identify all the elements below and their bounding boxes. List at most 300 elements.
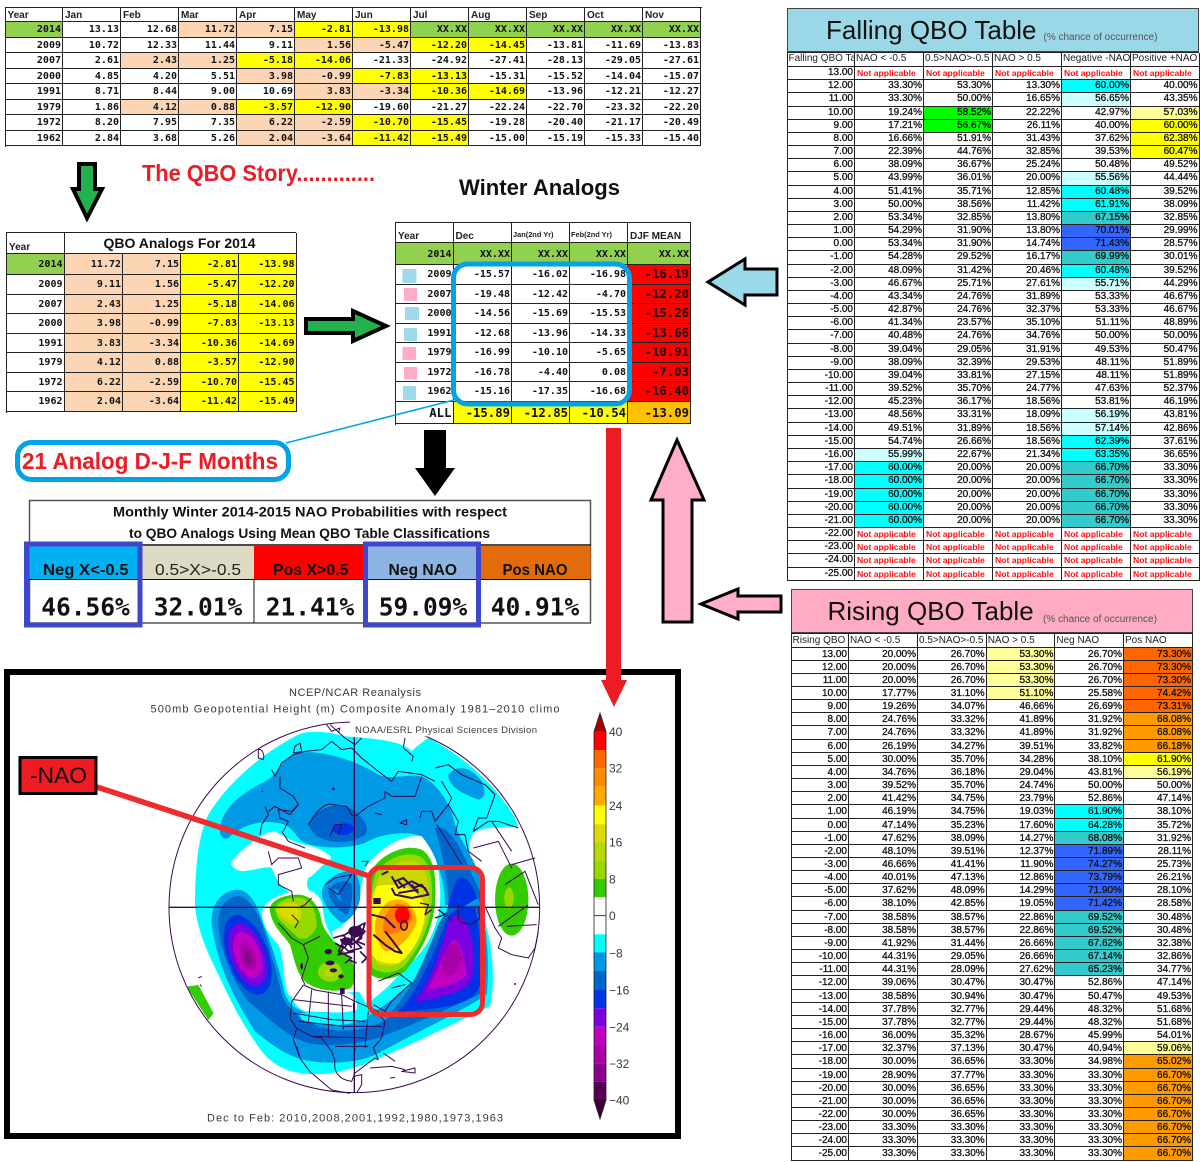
table: winter analogs: XX.XX <box>480 249 510 260</box>
falling table data grid: -8.00 <box>830 344 853 355</box>
falling table data grid: -5.00 <box>830 304 853 315</box>
falling table data grid: 22.67% <box>957 449 991 460</box>
falling table data grid: 54.74% <box>888 436 922 447</box>
rising table data grid: 52.86% <box>1088 793 1122 804</box>
falling table data grid: 50.00% <box>1095 330 1129 341</box>
large southern blue band <box>212 890 488 1063</box>
table: QBO analogs for 2014: -13.13 <box>258 318 294 329</box>
table: winter analogs: -5.65 <box>596 347 626 358</box>
rising table data grid: 30.00% <box>882 1056 916 1067</box>
rising table data grid: 38.57% <box>951 912 985 923</box>
probability values <box>41 592 579 622</box>
falling table data grid: 56.19% <box>1095 409 1129 420</box>
probability values: 40.91% <box>491 592 579 622</box>
table: winter analogs: XX.XX <box>538 249 568 260</box>
probabilities title <box>113 504 507 541</box>
rising table data grid: 33.32% <box>951 727 985 738</box>
falling table data grid: 32.85% <box>1164 212 1198 223</box>
table: monthly QBO values by year: 8.44 <box>153 86 177 97</box>
panel: winter NAO probabilities: Neg NAO <box>388 562 457 579</box>
table: monthly QBO values by year: 5.51 <box>211 70 235 82</box>
falling table data grid: 39.52% <box>1164 186 1198 197</box>
rising table data grid: -24.00 <box>819 1135 847 1146</box>
table: monthly QBO values by year: XX.XX <box>611 24 641 35</box>
rising table data grid: -18.00 <box>819 1056 847 1067</box>
table: QBO analogs for 2014: 1962 <box>38 396 62 407</box>
rising table data grid: 6.00 <box>828 741 847 752</box>
rising table title: (% chance of occurrence) <box>1043 614 1157 625</box>
falling table data grid: Not applicable <box>857 529 916 539</box>
table: winter analogs: -12.68 <box>474 328 510 339</box>
rising table data grid: 68.08% <box>1157 714 1191 725</box>
table: QBO analogs for 2014 <box>6 232 296 412</box>
table: monthly QBO values by year: -10.70 <box>373 117 409 128</box>
falling table data grid: Not applicable <box>1064 569 1123 579</box>
table: monthly QBO values by year: 3.98 <box>269 70 293 82</box>
falling table data grid: -10.00 <box>825 370 853 381</box>
falling table data grid: 48.09% <box>888 265 922 276</box>
table: monthly QBO values by year: 2000 <box>37 70 61 82</box>
rising table data grid: 66.70% <box>1157 1109 1191 1120</box>
falling table data grid: -14.00 <box>825 423 853 434</box>
rising table data grid: 48.10% <box>882 846 916 857</box>
table: QBO analogs for 2014: 1991 <box>38 338 62 348</box>
falling table data grid: -15.00 <box>825 436 853 447</box>
rising table data grid: 13.00 <box>822 648 847 660</box>
falling table data grid: 58.52% <box>957 107 991 118</box>
rising table data grid: -1.00 <box>824 833 847 844</box>
probabilities title: Monthly Winter 2014-2015 NAO Probabilities with respect <box>113 504 507 520</box>
table: monthly QBO values by year: 13.13 <box>89 24 119 35</box>
rising table data grid: 33.30% <box>1019 1135 1053 1146</box>
table: monthly QBO values by year: -22.20 <box>663 102 699 112</box>
falling table data grid: Not applicable <box>1133 529 1192 539</box>
table: monthly QBO values by year: 7.35 <box>211 117 235 128</box>
falling table data grid: -25.00 <box>825 568 853 579</box>
header: Neg X<-0.5 <box>30 546 142 580</box>
falling table data grid: 11.42% <box>1027 199 1060 210</box>
rising table data grid: 39.51% <box>951 846 985 857</box>
panel: winter NAO probabilities: 0.5>X>-0.5 <box>155 562 241 579</box>
table: monthly QBO values by year: -22.70 <box>547 102 583 112</box>
falling table data grid: 53.33% <box>1095 291 1129 302</box>
rising table data grid: 66.70% <box>1157 1148 1191 1159</box>
table: QBO analogs for 2014: -5.47 <box>207 279 237 290</box>
colour bar labels: −16 <box>609 984 630 998</box>
falling table data grid: 40.00% <box>1164 80 1198 91</box>
falling table data grid: 70.01% <box>1095 225 1129 236</box>
rising table data grid: -23.00 <box>819 1122 847 1133</box>
falling table data grid: 16.66% <box>888 133 922 144</box>
table: winter analogs: 1972 <box>427 367 452 378</box>
falling table data grid: 18.56% <box>1026 423 1060 434</box>
rising table data grid: 28.09% <box>951 964 985 975</box>
table: monthly QBO values by year: 8.71 <box>95 86 119 97</box>
table: winter analogs: Jan(2nd Yr) <box>513 230 554 238</box>
falling table data grid: 54.28% <box>888 251 922 262</box>
rising table data grid: 50.00% <box>1088 780 1122 791</box>
rising table data grid: 12.00 <box>822 662 847 673</box>
falling table data grid: 62.38% <box>1164 133 1198 144</box>
falling table data grid: 60.00% <box>1164 120 1198 131</box>
rising table data grid: 41.92% <box>882 938 916 949</box>
callout: 21 Analog D-J-F Months <box>18 442 288 480</box>
table: monthly QBO values by year: -5.18 <box>263 55 293 66</box>
falling table title <box>786 8 1198 52</box>
rising table data grid: 44.31% <box>882 964 916 975</box>
rising table data grid: 53.30% <box>1019 675 1053 686</box>
rising table data grid: 74.27% <box>1088 859 1122 870</box>
table: winter analogs: 0.08 <box>602 367 626 378</box>
colour bar <box>594 713 630 1119</box>
table: monthly QBO values by year: -13.83 <box>663 40 699 50</box>
panel: winter NAO probabilities: Neg X<-0.5 <box>43 562 129 579</box>
falling table data grid: 51.91% <box>957 133 991 144</box>
falling table data grid: 26.11% <box>1027 120 1060 131</box>
colour bar labels: 40 <box>609 725 623 739</box>
table: winter analogs: 2014 <box>427 249 452 260</box>
rising table data grid: NAO < -0.5 <box>850 635 900 646</box>
table: monthly QBO values by year: 2014 <box>37 24 61 35</box>
table: monthly QBO values by year: -15.31 <box>489 70 525 82</box>
rising table data grid: 46.19% <box>882 806 916 817</box>
table: monthly QBO values by year: 2009 <box>37 40 61 50</box>
rising table data grid: -8.00 <box>824 925 847 936</box>
table: QBO analogs for 2014: 6.22 <box>97 376 121 388</box>
rising table data grid: 47.13% <box>951 872 985 883</box>
probability values: 21.41% <box>266 592 354 622</box>
table: winter analogs: XX.XX <box>596 249 626 260</box>
table: winter analogs: -16.19 <box>645 267 689 281</box>
header: Neg NAO <box>366 546 479 580</box>
falling table data grid: 33.30% <box>888 80 922 91</box>
falling table data grid: 0.00 <box>834 238 853 249</box>
table: monthly QBO values by year: -2.59 <box>321 117 351 128</box>
falling table data grid: 71.43% <box>1095 238 1129 249</box>
colour bar labels <box>609 725 630 1108</box>
arrow: green right <box>306 311 386 341</box>
falling table data grid: 31.89% <box>957 423 991 434</box>
falling table data grid: 55.71% <box>1095 278 1129 289</box>
falling table data grid: -21.00 <box>825 515 853 526</box>
table: monthly QBO values by year: -0.99 <box>321 70 351 82</box>
falling table data grid: 56.65% <box>1095 93 1129 104</box>
falling table data grid: 66.70% <box>1095 462 1129 473</box>
table: winter analogs: -13.09 <box>645 406 689 420</box>
rising table data grid: 32.37% <box>882 1043 916 1054</box>
rising table data grid: 34.75% <box>951 806 985 817</box>
falling table data grid: 51.11% <box>1096 317 1129 328</box>
table: monthly QBO values by year: -19.28 <box>489 117 525 128</box>
table: monthly QBO values by year: 7.15 <box>269 24 293 35</box>
table: monthly QBO values by year: Jan <box>65 10 82 20</box>
rising table data grid: 38.58% <box>882 912 916 923</box>
falling table data grid: 41.34% <box>888 317 922 328</box>
falling table data grid: 29.99% <box>1164 225 1198 236</box>
falling table data grid: 33.30% <box>1164 475 1198 486</box>
table: winter analogs: 1979 <box>427 347 452 358</box>
falling table data grid: 24.76% <box>957 291 991 302</box>
falling table data grid: 66.70% <box>1095 488 1129 500</box>
falling table data grid: 50.47% <box>1164 344 1198 355</box>
falling table data grid: 43.34% <box>888 291 922 302</box>
rising table data grid: 24.74% <box>1019 780 1053 791</box>
rising table data grid: 67.14% <box>1088 951 1122 962</box>
table: monthly QBO values by year: -14.06 <box>315 55 351 66</box>
table: monthly QBO values by year: 5.26 <box>211 132 235 144</box>
table: monthly QBO values by year: Nov <box>645 10 664 20</box>
falling table data grid: 36.65% <box>1164 449 1198 460</box>
falling table data grid: 35.70% <box>957 383 991 394</box>
rising table data grid: 50.47% <box>1088 991 1122 1002</box>
falling table data grid: 46.67% <box>1164 304 1198 315</box>
rising table data grid: 52.86% <box>1088 977 1122 988</box>
table: winter analogs: -13.96 <box>532 328 568 339</box>
rising table data grid: 32.86% <box>1157 951 1191 962</box>
falling table data grid: 60.47% <box>1164 146 1198 157</box>
upper blue region <box>220 752 483 905</box>
rising table data grid: 48.32% <box>1088 1017 1122 1028</box>
falling table data grid: 55.56% <box>1095 172 1129 183</box>
rising table data grid: 44.31% <box>882 951 916 962</box>
rising table data grid: 20.00% <box>882 675 916 686</box>
falling table data grid: Not applicable <box>857 542 916 552</box>
rising table data grid: -20.00 <box>819 1083 847 1094</box>
rising table data grid: 25.73% <box>1157 859 1191 870</box>
falling table data grid: 37.62% <box>1095 133 1129 144</box>
falling table data grid: 51.89% <box>1164 357 1198 368</box>
falling table data grid: 42.97% <box>1095 107 1129 118</box>
rising table data grid: 66.18% <box>1157 741 1191 752</box>
rising table data grid: 74.42% <box>1157 688 1191 699</box>
falling table data grid: 33.30% <box>1164 462 1198 473</box>
falling table data grid: 43.99% <box>888 172 922 183</box>
falling table data grid: 53.81% <box>1095 396 1129 407</box>
rising table data grid: 20.00% <box>882 648 916 660</box>
table: monthly QBO values by year: -10.36 <box>431 86 467 97</box>
rising table data grid: 73.30% <box>1157 648 1191 660</box>
rising table data grid: -15.00 <box>819 1017 847 1028</box>
rising table data grid: 11.00 <box>823 675 847 686</box>
falling table data grid: 13.80% <box>1026 225 1060 236</box>
falling table data grid: -24.00 <box>825 554 853 565</box>
table: winter analogs: ALL <box>429 406 452 420</box>
falling table data grid: -22.00 <box>825 528 853 539</box>
rising table data grid: 65.02% <box>1157 1056 1191 1067</box>
table: winter analogs: XX.XX <box>659 249 689 260</box>
rising table data grid: 9.00 <box>828 701 847 712</box>
leader line from -NAO label <box>97 787 369 876</box>
header: Pos NAO <box>479 546 590 580</box>
rising table data grid: 33.30% <box>882 1148 916 1159</box>
rising table data grid: 28.10% <box>1157 885 1191 896</box>
falling table data grid: 18.56% <box>1026 396 1060 407</box>
rising table title: Rising QBO Table <box>828 596 1034 626</box>
falling table data grid: 33.30% <box>1164 515 1198 526</box>
falling table data grid: 36.17% <box>957 396 991 407</box>
falling table data grid: Not applicable <box>1064 529 1123 539</box>
table: winter analogs: -16.40 <box>645 384 689 398</box>
table: winter analogs: -16.78 <box>474 367 510 378</box>
table: monthly QBO values by year: Mar <box>181 10 199 20</box>
falling table data grid: Not applicable <box>857 555 916 565</box>
falling table data grid: NAO > 0.5 <box>994 52 1041 64</box>
rising table data grid: 34.76% <box>882 767 916 778</box>
table: monthly QBO values by year: 3.68 <box>153 132 177 144</box>
table: winter analogs: -15.69 <box>532 308 568 319</box>
rising table data grid: 42.85% <box>951 898 985 909</box>
rising table data grid: 33.30% <box>882 1135 916 1146</box>
falling table data grid: -7.00 <box>830 330 853 341</box>
falling table data grid: 48.11% <box>1096 370 1129 381</box>
falling table data grid: 60.00% <box>888 488 922 500</box>
falling table data grid: 22.22% <box>1026 107 1060 118</box>
rising table data grid: 36.00% <box>882 1030 916 1041</box>
table: winter analogs: -15.89 <box>466 406 510 420</box>
rising table data grid: 33.32% <box>951 714 985 725</box>
falling table data grid: 39.53% <box>1095 146 1129 157</box>
table: winter analogs: -15.26 <box>645 306 689 320</box>
rising table data grid: -22.00 <box>819 1109 847 1120</box>
colour bar labels: 24 <box>609 799 623 813</box>
falling table data grid: -23.00 <box>825 541 853 552</box>
falling table data grid: 49.52% <box>1164 159 1198 170</box>
falling table data grid: 66.70% <box>1095 475 1129 486</box>
rising table data grid: 65.23% <box>1088 964 1122 975</box>
rising table data grid: 12.86% <box>1019 872 1053 883</box>
falling table data grid: 9.00 <box>834 120 853 131</box>
table: winter analogs: 1962 <box>427 386 452 397</box>
falling table data grid: 53.34% <box>888 238 922 249</box>
rising table data grid: 33.30% <box>1019 1083 1053 1094</box>
falling table data grid: 33.30% <box>888 93 922 104</box>
rising table data grid: 25.58% <box>1088 688 1122 699</box>
rising table data grid: 29.05% <box>951 951 985 962</box>
rising table data grid: 40.94% <box>1088 1043 1122 1054</box>
falling table data grid: 3.00 <box>834 199 853 210</box>
falling table data grid: -9.00 <box>830 357 853 368</box>
falling table data grid: 62.39% <box>1095 436 1129 447</box>
western canada high <box>270 895 355 991</box>
table: winter analogs: -10.10 <box>532 347 568 358</box>
falling table data grid: 20.00% <box>957 462 991 473</box>
falling table data grid: 29.52% <box>957 251 991 262</box>
rising table data grid: 66.70% <box>1157 1096 1191 1107</box>
rising table data grid: 0.5>NAO>-0.5 <box>919 635 983 646</box>
falling table data grid: 42.87% <box>888 304 922 315</box>
table: monthly QBO values by year: 2.84 <box>95 132 119 144</box>
falling table data grid: 13.00 <box>828 67 853 78</box>
table: QBO analogs for 2014: -15.49 <box>258 396 294 407</box>
rising table data grid: 30.48% <box>1157 925 1191 936</box>
table: monthly QBO values by year: -3.34 <box>379 86 409 97</box>
table: winter analogs: 1991 <box>427 328 452 339</box>
table: monthly QBO values by year: 3.83 <box>327 86 351 97</box>
table: monthly QBO values by year: -29.05 <box>605 55 641 66</box>
map titles: 500mb Geopotential Height (m) Composite Anomaly 1981–2010 climo <box>150 704 560 716</box>
table: monthly QBO values by year: -15.00 <box>489 132 525 144</box>
rising table data grid: 41.89% <box>1019 714 1053 725</box>
rising table data grid: 33.30% <box>1019 1122 1053 1133</box>
falling table data grid: Positive +NAO <box>1132 52 1197 64</box>
year category colour keys <box>402 269 419 400</box>
table: winter analogs: -4.70 <box>596 289 626 300</box>
falling table data grid: 43.81% <box>1164 409 1198 420</box>
falling table data grid: -2.00 <box>830 265 853 276</box>
table: monthly QBO values by year: 10.72 <box>89 40 119 50</box>
table: monthly QBO values by year: 1.86 <box>95 102 119 112</box>
falling table data grid: 53.30% <box>957 80 991 91</box>
table: monthly QBO values by year: 11.72 <box>205 24 235 35</box>
falling table data grid: 33.30% <box>1164 488 1198 500</box>
rising table data grid: 30.47% <box>1019 991 1053 1002</box>
table: monthly QBO values by year: -3.64 <box>321 132 351 144</box>
falling table data grid: 48.56% <box>888 409 922 420</box>
rising table data grid: 47.62% <box>882 833 916 844</box>
falling table data grid: 24.76% <box>957 330 991 341</box>
rising table data grid: 26.69% <box>1088 701 1122 712</box>
rising table data grid: 66.70% <box>1157 1070 1191 1080</box>
table: monthly QBO values by year: -11.69 <box>605 40 641 50</box>
table: winter analogs: -4.40 <box>538 367 568 378</box>
heading: Winter Analogs: Winter Analogs <box>459 175 620 200</box>
table: monthly QBO values by year: -21.33 <box>373 55 409 66</box>
falling table data grid: 29.05% <box>957 344 991 355</box>
rising table data grid: 17.60% <box>1019 820 1053 831</box>
table: monthly QBO values by year: May <box>297 10 316 20</box>
map titles: Dec to Feb: 2010,2008,2001,1992,1980,1973,1963 <box>207 1112 503 1124</box>
falling table title: (% chance of occurrence) <box>1044 32 1157 42</box>
table: monthly QBO values by year: -3.57 <box>263 102 293 112</box>
rising table data grid: 71.90% <box>1088 885 1122 896</box>
table: monthly QBO values by year: 6.22 <box>269 117 293 128</box>
table: winter analogs: -13.66 <box>645 326 689 340</box>
table: monthly QBO values by year: -13.98 <box>373 24 409 35</box>
rising table data grid: 40.01% <box>882 872 916 883</box>
falling table data grid: 44.76% <box>957 146 991 157</box>
falling table data grid: 33.30% <box>1164 502 1198 513</box>
table: winter analogs <box>395 222 691 424</box>
rising table data grid: 19.03% <box>1019 806 1053 817</box>
rising table data grid: 49.53% <box>1157 991 1191 1002</box>
table: QBO analogs for 2014: 2000 <box>38 318 62 329</box>
rising table data grid <box>790 633 1192 1161</box>
rising table data grid: 36.18% <box>951 767 985 778</box>
falling table data grid: 31.43% <box>1026 133 1060 144</box>
rising table data grid: 4.00 <box>828 767 847 778</box>
colour bar labels: 8 <box>609 872 616 886</box>
table: monthly QBO values by year: 11.44 <box>205 40 235 50</box>
rising table data grid: 20.00% <box>882 662 916 673</box>
falling table data grid: -4.00 <box>830 291 853 302</box>
panel: winter NAO probabilities: Pos X>0.5 <box>273 562 349 579</box>
rising table data grid: 47.14% <box>1157 793 1191 804</box>
rising table data grid: 30.47% <box>951 977 985 988</box>
falling table data grid: 60.00% <box>888 475 922 486</box>
rising table data grid: -4.00 <box>824 872 847 883</box>
table: winter analogs: Dec <box>456 230 474 242</box>
rising table data grid: 7.00 <box>828 727 847 738</box>
arrow: pink up <box>651 440 704 622</box>
table: monthly QBO values by year: -27.41 <box>489 55 525 66</box>
table: monthly QBO values by year: -5.47 <box>379 40 409 50</box>
table: QBO analogs for 2014: -3.64 <box>149 396 179 407</box>
rising table data grid: 36.65% <box>951 1109 985 1120</box>
north pacific low <box>224 915 272 995</box>
table: QBO analogs for 2014: -12.20 <box>258 279 294 290</box>
falling table data grid: Not applicable <box>1064 68 1123 78</box>
table: monthly QBO values by year: 9.00 <box>211 86 235 97</box>
